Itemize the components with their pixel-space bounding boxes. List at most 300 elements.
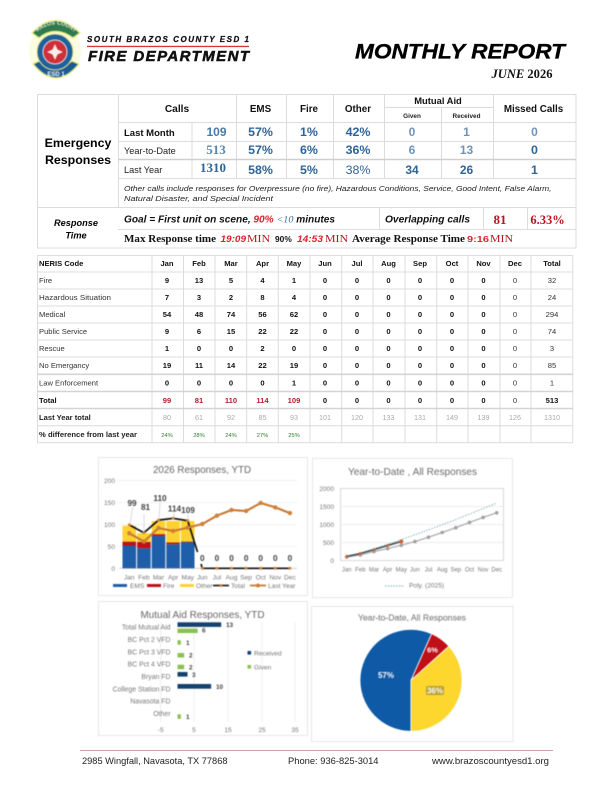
row: last month: 42% [346,125,370,139]
month labels: Jan [342,568,352,574]
y axis labels: 0 [111,566,115,573]
legend: Given [254,664,272,672]
row: fire: 0 [481,276,486,285]
column headers: Missed Calls [504,104,564,115]
row: total: 114 [256,396,269,405]
row: public service: 15 [227,327,236,336]
legend: Fire [163,583,175,590]
row: total: 513 [546,396,558,405]
row: hazardous situation: 8 [260,293,265,302]
note: other calls [124,184,552,203]
row: no emergency [39,361,556,370]
row: year-to-date: 36% [346,143,370,157]
row: last month: 57% [248,125,273,139]
month labels: Jul [213,574,222,582]
column headers: Other [345,104,371,115]
row: fire: 13 [195,276,203,285]
y axis labels: 1500 [319,504,334,511]
row: last year total: 126 [509,413,521,422]
row: last year: 38% [346,163,370,177]
row: medical: Medical [39,310,65,319]
department name: SOUTH BRAZOS COUNTY ESD 1 [87,35,250,44]
month labels: Aug [437,568,448,574]
row: last year total: 85 [258,413,266,422]
row: rescue: 3 [550,344,554,353]
month labels: Mar [369,568,379,574]
line markers [127,501,292,570]
month labels: May [396,568,407,574]
x axis labels: 25 [258,727,266,734]
row: no emergency: No Emergancy [39,361,89,370]
row: last month: 0 [409,125,416,139]
table header row: Jul [352,259,362,268]
row: percent difference: % difference from last year [39,430,137,439]
row: total: 109 [288,396,300,405]
heading: emergency responses [45,136,112,167]
slice: fire [411,634,449,680]
row: no emergency: 0 [386,361,391,370]
month labels: Oct [256,574,266,582]
last year line [129,503,290,542]
row: last year total: 1310 [544,413,560,422]
row: rescue: 0 [481,344,486,353]
row: no emergency: 0 [450,361,454,370]
table: NERIS code monthly breakdown [37,255,573,443]
legend: Last Year [268,583,296,590]
month labels: Jul [425,568,432,574]
row: total: 110 [225,396,237,405]
bar values: 2 [189,664,193,672]
chart: year-to-date all responses line [312,458,512,598]
response time figures: 90% [275,234,292,244]
row: law enforcement: 0 [355,378,359,388]
row: medical [39,310,558,319]
row: fire: 0 [386,276,391,285]
row: law enforcement: 0 [323,378,327,388]
row: hazardous situation: Hazardous Situation [39,293,111,302]
row: last year: 34 [405,163,419,177]
row: public service: 0 [355,327,359,336]
row: rescue: Rescue [39,344,65,353]
response time figures: MIN [490,234,513,245]
response time figures: 14:53 [297,234,323,244]
row: percent difference: 24% [161,433,173,439]
data labels [127,494,293,563]
row: year-to-date: 57% [248,143,273,157]
column headers: Mutual Aid [414,95,462,106]
row: hazardous situation [39,293,556,302]
row: medical: 294 [546,310,558,319]
last year cumulative line [347,513,497,557]
column headers: Calls [165,104,190,115]
row: public service: 0 [323,327,327,336]
row: last month: 0 [531,125,538,139]
row: medical: 0 [450,310,454,319]
table header row: Jun [318,259,332,268]
row: no emergency: 0 [481,361,486,370]
slice labels [378,646,444,696]
row: no emergency: 11 [195,361,204,370]
y axis labels: 50 [108,544,115,551]
footer: www.brazoscountyesd1.org [431,756,549,766]
bar values: 10 [216,684,224,691]
row: last year total: Last Year total [39,413,91,422]
row: percent difference: 25% [288,433,300,439]
row: last year: 1310 [200,160,226,175]
row: total: 0 [481,396,486,405]
month labels: Nov [478,568,488,574]
row: last year: Last Year [124,165,162,175]
category labels: BC Pct 4 VFD [128,662,171,668]
row: no emergency: 85 [548,361,556,370]
row: public service: 0 [386,327,391,336]
response time figures [124,234,513,245]
goal statement: Goal = First unit on scene, 90% <10 minutes [124,214,336,226]
data labels: 0 [215,554,220,563]
department name [87,35,251,65]
row: public service: 0 [418,327,422,336]
row: last month: Last Month [124,128,175,139]
category labels: BC Pct 3 VFD [128,650,171,656]
row: fire: Fire [39,276,52,285]
row: law enforcement: 0 [260,378,265,388]
y axis labels: 200 [104,478,115,485]
category labels: Bryan FD [141,674,171,681]
chart: mutual aid responses [98,602,308,736]
month labels: Jun [410,568,420,574]
category labels: Other [153,711,171,718]
column headers: Fire [300,104,319,115]
month labels: Feb [138,574,150,582]
x axis labels: -5 [158,727,164,734]
chart title: Year-to-Date, All Responses [358,614,466,622]
column headers: EMS [250,104,272,115]
y axis labels [319,486,334,565]
row: last year [124,160,538,177]
row: public service: 74 [548,327,556,336]
row: public service: Public Service [39,327,87,336]
polynomial trend line [347,503,497,558]
row: last year total [39,413,560,422]
row: total: 0 [513,396,517,405]
row: medical: 0 [355,310,359,319]
y axis labels: 0 [330,558,334,565]
logo: Brazos County ESD 1 badge [28,19,82,80]
y axis labels: 2000 [319,486,334,493]
row: year-to-date: 6 [409,143,416,157]
row: last year total: 92 [227,413,235,422]
bar values: 6 [202,628,206,634]
legend: Received [254,650,282,658]
row: hazardous situation: 0 [386,293,391,302]
chart: 2026 responses YTD [98,458,308,596]
row: hazardous situation: 24 [548,293,556,302]
category labels [113,624,171,718]
row: last year total: 61 [195,413,203,422]
chart title: Year-to-Date , All Responses [348,466,477,478]
month labels [342,568,502,574]
month labels: Sep [450,568,462,574]
month labels: Apr [383,568,392,574]
row: year-to-date: 0 [531,143,538,157]
table header row: NERIS Code [39,259,83,268]
row: public service [39,327,556,336]
data labels: 0 [258,554,263,563]
month labels: Jan [124,574,135,582]
slice labels: 6% [427,646,438,654]
row: law enforcement: 0 [513,378,517,388]
response time figures: MIN [247,234,270,245]
row: hazardous situation: 3 [197,293,201,302]
slice labels: 36% [427,686,443,696]
row: fire: 4 [260,276,265,285]
row: no emergency: 14 [227,361,236,370]
row: hazardous situation: 4 [292,293,297,302]
slice: other [411,646,462,731]
table header row: Dec [508,259,522,268]
row: law enforcement: 0 [197,378,201,388]
row: fire: 0 [355,276,359,285]
data labels: 0 [288,554,293,563]
overlapping calls: 6.33% [530,213,565,227]
legend [113,583,296,590]
row: rescue: 0 [323,344,327,353]
row: public service: 0 [481,327,486,336]
row: last month: 1% [300,125,318,139]
heading: emergency responses: Emergency [45,136,112,150]
row: percent difference: 27% [257,433,268,439]
legend: EMS [130,583,145,590]
data labels: 99 [127,499,137,508]
row: medical: 0 [481,310,486,319]
data labels: 0 [200,554,205,563]
chart title: Mutual Aid Responses, YTD [140,609,265,621]
row: rescue: 0 [197,344,201,353]
row: total: 0 [355,396,359,405]
table header row: Nov [476,259,491,268]
given bars [178,629,198,719]
row: law enforcement: 0 [418,378,422,388]
row: medical: 0 [323,310,327,319]
data labels: 81 [141,503,150,512]
row: fire: 5 [229,276,234,285]
department name: FIRE DEPARTMENT [88,48,251,65]
row: rescue: 0 [418,344,422,353]
logo: Brazos County ESD 1 badge: ESD 1 [47,72,65,78]
table header row: Jan [160,259,174,268]
y axis labels: 1000 [319,522,334,529]
row: last year: 5% [300,163,318,177]
row: law enforcement: Law Enforcement [39,378,99,388]
row: last year total: 133 [382,413,394,422]
subtitle: month: JUNE 2026 [491,66,553,81]
data labels: 114 [168,504,182,514]
month labels: Aug [226,574,238,582]
month labels: Mar [153,574,165,582]
row: percent difference: 24% [225,433,237,439]
row: no emergency: 19 [290,361,298,370]
current year cumulative line [347,542,401,556]
row: fire [39,276,556,285]
row: medical: 0 [386,310,391,319]
row: public service: 6 [197,327,201,336]
row: fire: 32 [548,276,556,285]
row: rescue [39,344,554,353]
response time figures: Average Response Time [352,234,465,245]
row: law enforcement [39,378,554,388]
table header row: Oct [446,259,459,268]
month labels: Nov [269,574,282,582]
slice: EMS [360,629,432,731]
bar values: 2 [189,652,193,660]
bar values [186,622,234,721]
response time figures: MIN [325,234,348,245]
footer: Phone: 936-825-3014 [288,756,378,766]
row: medical: 0 [513,310,517,319]
y axis labels [104,478,115,573]
row: medical: 54 [163,310,172,319]
row: hazardous situation: 0 [481,293,486,302]
row: last year: 58% [248,163,273,177]
month labels: Sep [240,574,252,582]
row: rescue: 2 [260,344,265,353]
row: hazardous situation: 7 [165,293,169,302]
column headers [165,95,564,120]
row: total: 0 [450,396,454,405]
row: hazardous situation: 0 [450,293,454,302]
row: fire: 0 [323,276,327,285]
month labels [124,574,296,582]
table header row: Mar [224,259,238,268]
row: year-to-date: 513 [206,142,226,157]
row: no emergency: 0 [513,361,517,370]
heading: emergency responses: Responses [45,153,111,167]
overlapping calls: Overlapping calls [385,214,471,226]
bar values: 3 [192,672,196,679]
row: year-to-date: Year-to-Date [124,146,176,156]
row: fire: 9 [165,276,169,285]
stacked bars [122,521,194,568]
row: total: 99 [163,396,171,405]
row: year-to-date: 6% [300,143,318,157]
data labels: 110 [153,494,167,503]
chart title: 2026 Responses, YTD [153,465,251,476]
row: last year total: 120 [351,413,363,422]
month labels: Dec [491,568,502,574]
legend [248,650,282,672]
panel: emergency responses summary table [37,94,576,248]
legend: Poly. (2025) [409,582,444,590]
row: rescue: 0 [355,344,359,353]
overlapping calls: 81 [494,212,506,227]
table header row: Sep [413,259,427,268]
heading: response time: Time [65,230,87,240]
row: last year total: 149 [446,413,458,422]
note: other calls: Natural Disaster, and Special Incident [124,194,274,203]
legend: Total [231,583,245,590]
month labels: May [181,574,195,582]
row: medical: 56 [258,310,267,319]
row: medical: 48 [195,310,203,319]
category labels: Navasota FD [130,698,171,706]
month labels: Feb [355,568,366,574]
month labels: Jun [197,574,208,582]
received bars [178,622,221,689]
y axis labels: 500 [323,540,334,547]
row: percent difference: 28% [193,433,205,439]
row: last month: 1 [463,125,470,139]
footer [80,750,553,766]
month labels: Dec [284,574,296,582]
x axis labels: 35 [291,727,299,734]
row: public service: 22 [258,327,267,336]
row: fire: 0 [418,276,422,285]
heading: response time [54,218,98,240]
overlapping calls [385,212,565,227]
column headers: Received [452,113,481,120]
row: law enforcement: 0 [481,378,486,388]
row: public service: 22 [290,327,298,336]
category labels: BC Pct 2 VFD [128,637,171,644]
leader lines [130,503,188,532]
row: rescue: 0 [292,344,296,353]
response time figures: 19:09 [220,234,246,244]
row: hazardous situation: 2 [229,293,233,302]
row: last year total: 80 [163,413,171,422]
data labels: 0 [229,554,234,563]
x axis labels [158,727,299,734]
table header row: Apr [256,259,269,268]
x axis labels: 15 [224,727,232,734]
row: year-to-date [124,142,538,157]
row: no emergency: 0 [418,361,422,370]
row: no emergency: 0 [355,361,359,370]
row: last month [124,125,538,139]
row: last year total: 101 [319,413,331,422]
note: other calls: Other calls include responses for Overpressure (no fire), Hazardous Conditions, Service, Good Intent, False Alarm, [124,184,552,193]
row: total: 0 [418,396,422,405]
row: public service: 9 [165,327,169,336]
row: law enforcement: 0 [165,378,169,388]
footer: 2985 Wingfall, Navasota, TX 77868 [82,756,228,766]
row: medical: 0 [418,310,422,319]
bar values: 1 [186,640,190,647]
row: law enforcement: 1 [550,378,554,388]
row: total [39,396,558,405]
bar values: 1 [186,714,190,721]
data labels: 0 [273,554,278,563]
legend [385,582,444,590]
row: public service: 0 [513,327,517,336]
row: last year total: 131 [414,413,426,422]
heading: response time: Response [54,218,98,228]
row: last year total: 93 [290,413,298,422]
response time figures: Max Response time [124,234,216,245]
row: public service: 0 [450,327,454,336]
total line [129,518,290,568]
row: no emergency: 22 [258,361,267,370]
row: rescue: 0 [450,344,454,353]
y axis labels: 100 [104,522,115,529]
row: medical: 62 [290,310,298,319]
table header row: May [287,259,302,268]
month labels: Oct [465,568,474,574]
row: rescue: 0 [386,344,391,353]
row: total: 0 [323,396,327,405]
row: total: Total [39,396,57,405]
data labels: 109 [181,506,195,515]
row: medical: 74 [227,310,236,319]
